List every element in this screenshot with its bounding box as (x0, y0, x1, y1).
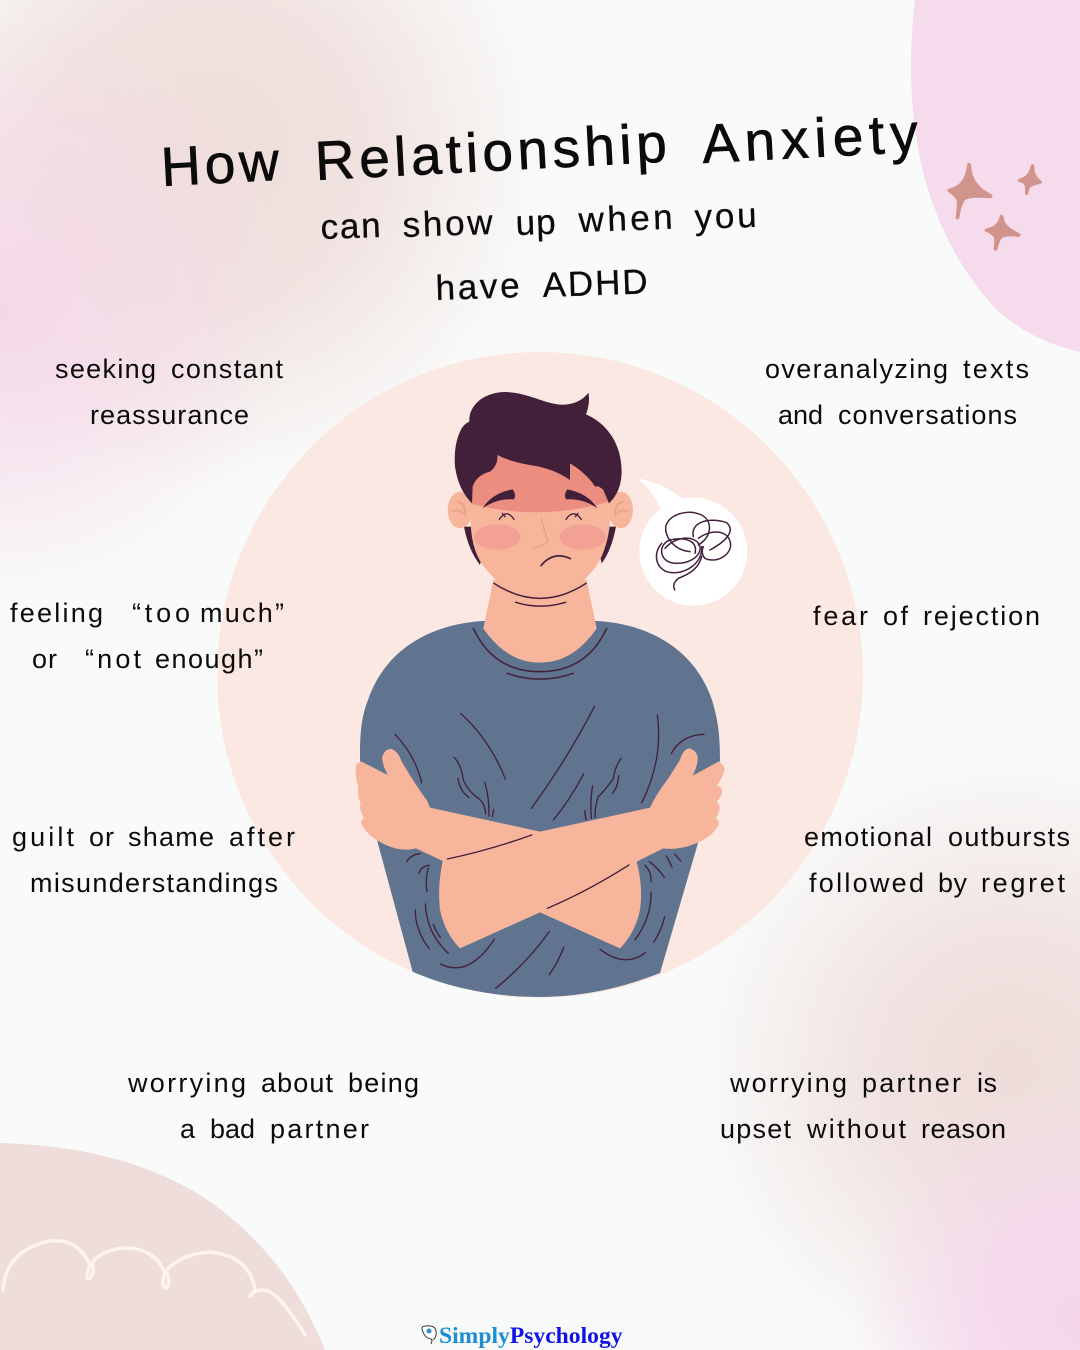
item: overanalyzing texts and conversations: conversations (838, 400, 1017, 430)
item: overanalyzing texts and conversations: overanalyzing (765, 354, 948, 384)
item: seeking constant reassurance (55, 354, 283, 430)
item: overanalyzing texts and conversations: and (778, 400, 823, 430)
item: feeling too much or not enough: “too (132, 598, 190, 628)
subtitle: ADHD (542, 262, 648, 305)
item: worrying partner is upset without reason: reason (921, 1114, 1006, 1144)
subtitle (320, 196, 757, 308)
decorative blob: bottom left (0, 1143, 325, 1350)
decorative blob: top right (911, 0, 1080, 352)
subtitle: have (435, 266, 520, 308)
item: seeking constant reassurance: seeking (55, 354, 156, 384)
item: worrying partner is upset without reason: worrying (729, 1068, 847, 1098)
title: Relationship (313, 112, 668, 192)
title: How (159, 130, 281, 198)
item: feeling too much or not enough: “not (85, 644, 141, 674)
icon: thought bubble with tangled scribble (638, 478, 747, 606)
subtitle: show (402, 203, 494, 245)
decorative cloud line (3, 1241, 305, 1335)
title (159, 102, 920, 198)
item: worrying about being a bad partner: a (180, 1114, 196, 1144)
subtitle: up (515, 203, 556, 243)
item: guilt or shame after misunderstandings: after (229, 822, 295, 852)
item: emotional outbursts followed by regret: followed (809, 868, 924, 898)
item: seeking constant reassurance: reassurance (90, 400, 249, 430)
item: emotional outbursts followed by regret: emotional (804, 822, 932, 852)
logo: SimplyPsychology: SimplyPsychology (439, 1323, 623, 1349)
subtitle: can (320, 206, 381, 247)
item: worrying partner is upset without reason: without (806, 1114, 906, 1144)
item: seeking constant reassurance: constant (171, 354, 283, 384)
item: fear of rejection: fear (813, 601, 868, 631)
illustration: anxious man hugging himself (356, 392, 724, 997)
item: worrying about being a bad partner: partner (270, 1114, 369, 1144)
item: emotional outbursts followed by regret: outbursts (948, 822, 1070, 852)
item: worrying about being a bad partner: bad (210, 1114, 255, 1144)
item: guilt or shame after misunderstandings: or (89, 822, 114, 852)
background wash: top left (0, 0, 600, 610)
title: Anxiety (700, 102, 920, 175)
item: emotional outbursts followed by regret (804, 822, 1070, 898)
item: worrying partner is upset without reason (720, 1068, 1006, 1144)
item: worrying about being a bad partner: about (261, 1068, 333, 1098)
crossed arms (356, 707, 724, 988)
subtitle: you (694, 196, 757, 237)
head (448, 392, 633, 679)
item: fear of rejection (813, 601, 1040, 631)
item: worrying partner is upset without reason: upset (720, 1114, 791, 1144)
subtitle: when (577, 198, 673, 240)
item: overanalyzing texts and conversations (765, 354, 1029, 430)
item: emotional outbursts followed by regret: regret (981, 868, 1065, 898)
item: emotional outbursts followed by regret: by (938, 868, 968, 898)
shirt (360, 621, 720, 997)
item: overanalyzing texts and conversations: texts (963, 354, 1029, 384)
item: feeling too much or not enough: much” (200, 598, 284, 628)
item: feeling too much or not enough: or (32, 644, 57, 674)
item: feeling too much or not enough (10, 598, 284, 674)
item: feeling too much or not enough: enough” (155, 644, 263, 674)
item: worrying about being a bad partner: being (348, 1068, 419, 1098)
item: guilt or shame after misunderstandings: shame (128, 822, 214, 852)
item: worrying about being a bad partner (127, 1068, 419, 1144)
item: guilt or shame after misunderstandings (12, 822, 295, 898)
background wash: bottom right (680, 740, 1080, 1350)
item: worrying partner is upset without reason: is (977, 1068, 997, 1098)
item: feeling too much or not enough: feeling (10, 598, 103, 628)
item: guilt or shame after misunderstandings: misunderstandings (30, 868, 278, 898)
item: fear of rejection: of (883, 601, 908, 631)
item: fear of rejection: rejection (923, 601, 1040, 631)
icon: sparkles (947, 163, 1042, 251)
item: worrying partner is upset without reason: partner (862, 1068, 961, 1098)
panel: central circle (217, 352, 863, 998)
item: worrying about being a bad partner: worrying (127, 1068, 246, 1098)
item: guilt or shame after misunderstandings: guilt (12, 822, 74, 852)
